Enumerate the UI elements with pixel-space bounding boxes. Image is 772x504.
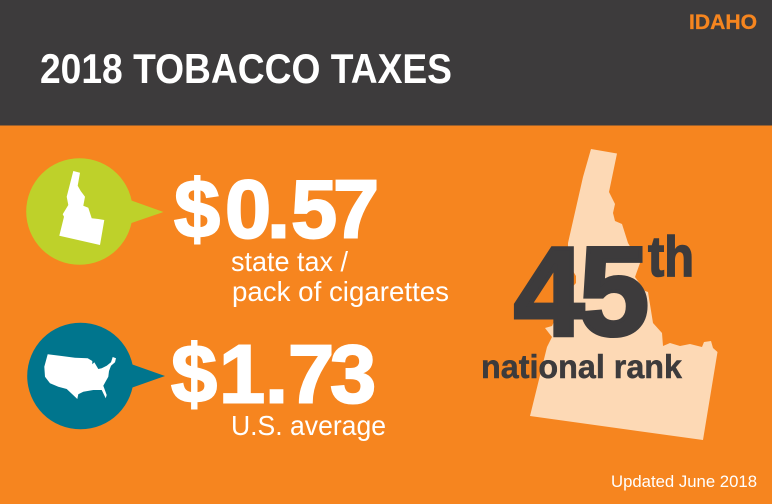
icon: Idaho speech bubble	[26, 158, 164, 265]
stat label: state tax: pack of cigarettes	[232, 276, 449, 307]
icon: U.S. silhouette	[44, 354, 116, 399]
icon: U.S. speech bubble	[27, 323, 165, 429]
state label: IDAHO	[689, 11, 757, 34]
map: Idaho state shape	[530, 149, 718, 440]
stat label: state tax	[231, 246, 449, 307]
title: 2018 TOBACCO TAXES	[40, 45, 452, 92]
stat label: state tax: state tax /	[231, 246, 348, 277]
header band	[0, 0, 772, 126]
rank suffix: th	[648, 225, 694, 289]
rank label: national rank	[481, 348, 683, 385]
stat: state tax amount: $0.57	[174, 162, 379, 256]
stat label: U.S. average: U.S. average	[231, 410, 386, 441]
icon: Idaho silhouette	[59, 171, 104, 245]
update note: Updated June 2018	[611, 472, 757, 491]
rank number: 45	[514, 221, 649, 362]
stat: U.S. average amount: $1.73	[171, 328, 376, 420]
